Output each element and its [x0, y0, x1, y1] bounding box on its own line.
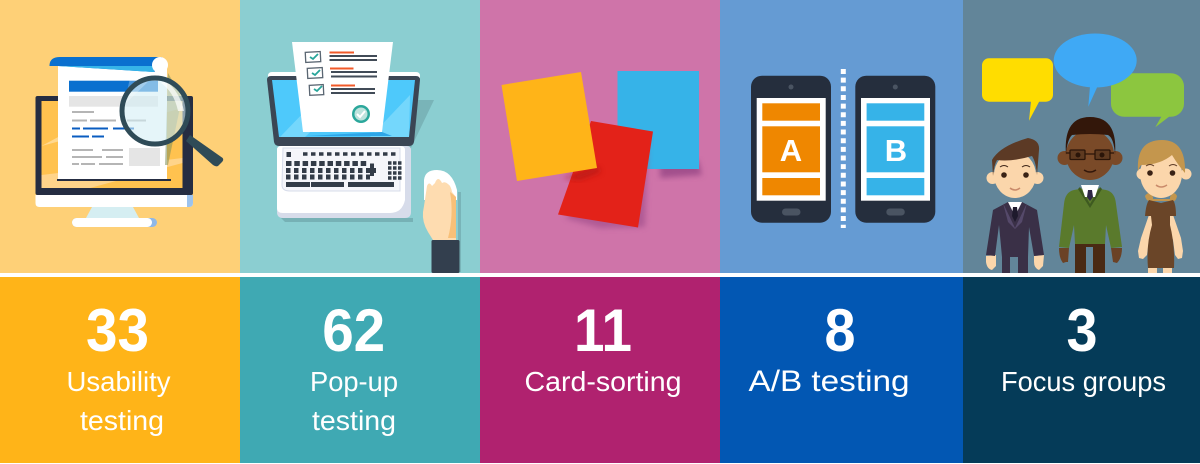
stat: A/B testing: [720, 277, 963, 463]
icon: desktop monitor: [36, 96, 193, 227]
stat: pop-up testing: [240, 277, 480, 463]
stat: pop-up testing: testing: [312, 405, 396, 436]
icon: woman in brown dress: [1136, 140, 1192, 273]
icon: web page document: [50, 57, 171, 181]
icon: man in suit: [986, 138, 1044, 273]
icon: red card: [558, 121, 653, 228]
dotted divider: [841, 69, 846, 228]
stat: usability testing: testing: [80, 405, 164, 436]
stat: card-sorting: 11: [574, 297, 632, 364]
icon: phone B: B: [885, 133, 907, 168]
panel: A/B testing illustration: [720, 0, 963, 273]
stat: focus groups: Focus groups: [1001, 366, 1166, 397]
panel: focus groups illustration: [963, 0, 1200, 273]
icon: checklist paper: [292, 42, 393, 136]
icon: blue card: [618, 71, 702, 178]
keyboard keys: [286, 152, 402, 184]
icon: laptop: [267, 72, 434, 222]
icon: phone B: [855, 76, 935, 223]
stat: usability testing: [0, 277, 240, 463]
icon: phone A: [751, 76, 831, 223]
panel: card-sorting illustration: [480, 0, 720, 273]
icon: hand on mouse: [423, 170, 461, 273]
icon: green speech bubble: [1111, 73, 1184, 127]
stat: pop-up testing: Pop-up: [310, 366, 398, 397]
icon: phone A: A: [780, 133, 802, 168]
stat: focus groups: [963, 277, 1200, 463]
icon: man with glasses: [1058, 117, 1122, 273]
stat: A/B testing: A/B testing: [748, 365, 910, 398]
panel: pop-up testing illustration: [240, 0, 480, 273]
icon: magnifying glass: [122, 73, 223, 166]
icon: yellow card: [502, 72, 597, 181]
stat: usability testing: Usability: [66, 366, 170, 397]
stat: focus groups: 3: [1066, 297, 1098, 364]
panel: usability testing illustration: [0, 0, 240, 273]
icon: yellow speech bubble: [982, 58, 1053, 121]
stat: card-sorting: Card-sorting: [524, 366, 682, 397]
stat: usability testing: 33: [86, 297, 149, 364]
stat: card-sorting: [480, 277, 720, 463]
icon: blue speech bubble: [1054, 34, 1137, 107]
stat: A/B testing: 8: [824, 297, 856, 364]
stat: pop-up testing: 62: [322, 297, 385, 364]
